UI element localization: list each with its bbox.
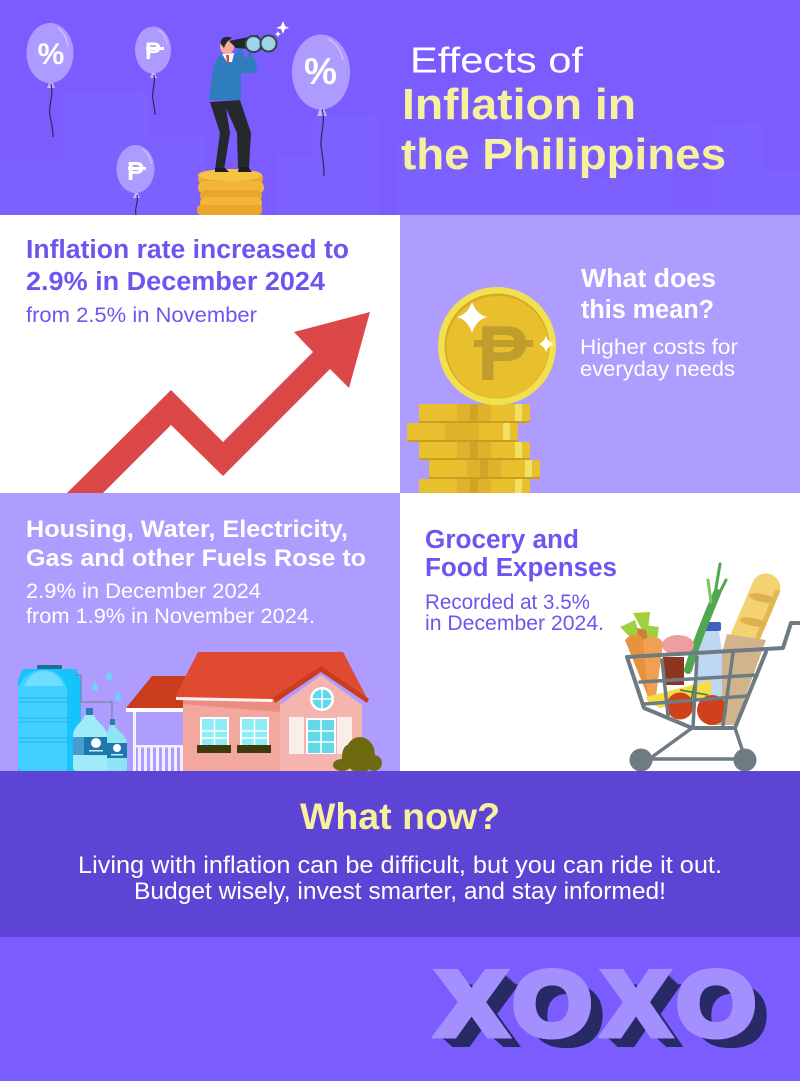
- title: the Philippines: [401, 130, 726, 179]
- heading: inflation rate: [26, 236, 349, 296]
- text: advice: [78, 852, 722, 905]
- text: higher costs: everyday needs: [580, 357, 735, 381]
- title: Inflation in: [402, 80, 636, 129]
- title: Effects of: [410, 40, 584, 80]
- heading: grocery: Grocery and: [425, 526, 579, 554]
- text: higher costs: Higher costs for: [580, 335, 738, 359]
- icon: house: [126, 652, 382, 773]
- icon: shopping cart: [620, 564, 800, 772]
- text: grocery figures: [425, 591, 604, 635]
- heading: housing: [26, 516, 366, 572]
- text: advice: Budget wisely, invest smarter, and stay informed!: [134, 878, 666, 905]
- panel: grocery and food: [400, 493, 800, 772]
- balloon: percent left: [26, 23, 74, 137]
- text: higher costs: [580, 335, 738, 381]
- panel: what now: [0, 771, 800, 937]
- heading: what does this mean: What does: [581, 265, 716, 293]
- text: housing figures: 2.9% in December 2024: [26, 579, 261, 603]
- text: housing figures: from 1.9% in November 2024.: [26, 604, 315, 628]
- balloon: peso bottom: [116, 145, 154, 215]
- coin stack under person: [197, 169, 264, 215]
- icon: gold coin stack: P: [477, 309, 529, 397]
- xoxo sign-off: O: [513, 954, 591, 1055]
- balloon: percent left: %: [38, 38, 64, 71]
- xoxo sign-off: O: [677, 954, 755, 1055]
- text: from November: from 2.5% in November: [26, 303, 257, 327]
- icon: water tank and bottles: [18, 665, 127, 771]
- heading: inflation rate: Inflation rate increased to: [26, 236, 349, 264]
- heading: housing: Gas and other Fuels Rose to: [26, 545, 366, 572]
- heading: what now: What now?: [300, 796, 500, 837]
- balloon: percent right: [292, 34, 350, 176]
- text: housing figures: [26, 579, 315, 628]
- heading: grocery: Food Expenses: [425, 554, 617, 582]
- heading: inflation rate: 2.9% in December 2024: [26, 268, 326, 296]
- heading: grocery: [425, 526, 617, 582]
- panel: what does this mean: [400, 215, 800, 493]
- icon: gold coin stack: [407, 287, 556, 493]
- text: grocery figures: Recorded at 3.5%: [425, 591, 590, 614]
- heading: what does this mean: this mean?: [581, 296, 714, 324]
- arrow: rising red: [67, 312, 370, 493]
- balloon: percent right: %: [304, 51, 337, 92]
- text: grocery figures: in December 2024.: [425, 612, 604, 635]
- balloon: peso bottom: P: [127, 156, 144, 186]
- balloon: peso top: [135, 26, 171, 115]
- person with binoculars: [209, 21, 289, 172]
- panel: housing and utilities: [0, 493, 400, 773]
- panel: header: [0, 0, 800, 215]
- heading: housing: Housing, Water, Electricity,: [26, 516, 348, 543]
- xoxo sign-off: X: [437, 954, 506, 1055]
- balloon: peso top: P: [145, 38, 161, 65]
- panel: inflation rate: [0, 215, 400, 493]
- text: advice: Living with inflation can be difficult, but you can ride it out.: [78, 852, 722, 879]
- xoxo sign-off: [432, 954, 767, 1055]
- xoxo sign-off: X: [603, 954, 669, 1055]
- heading: what does this mean: [581, 265, 716, 324]
- title: [401, 40, 726, 179]
